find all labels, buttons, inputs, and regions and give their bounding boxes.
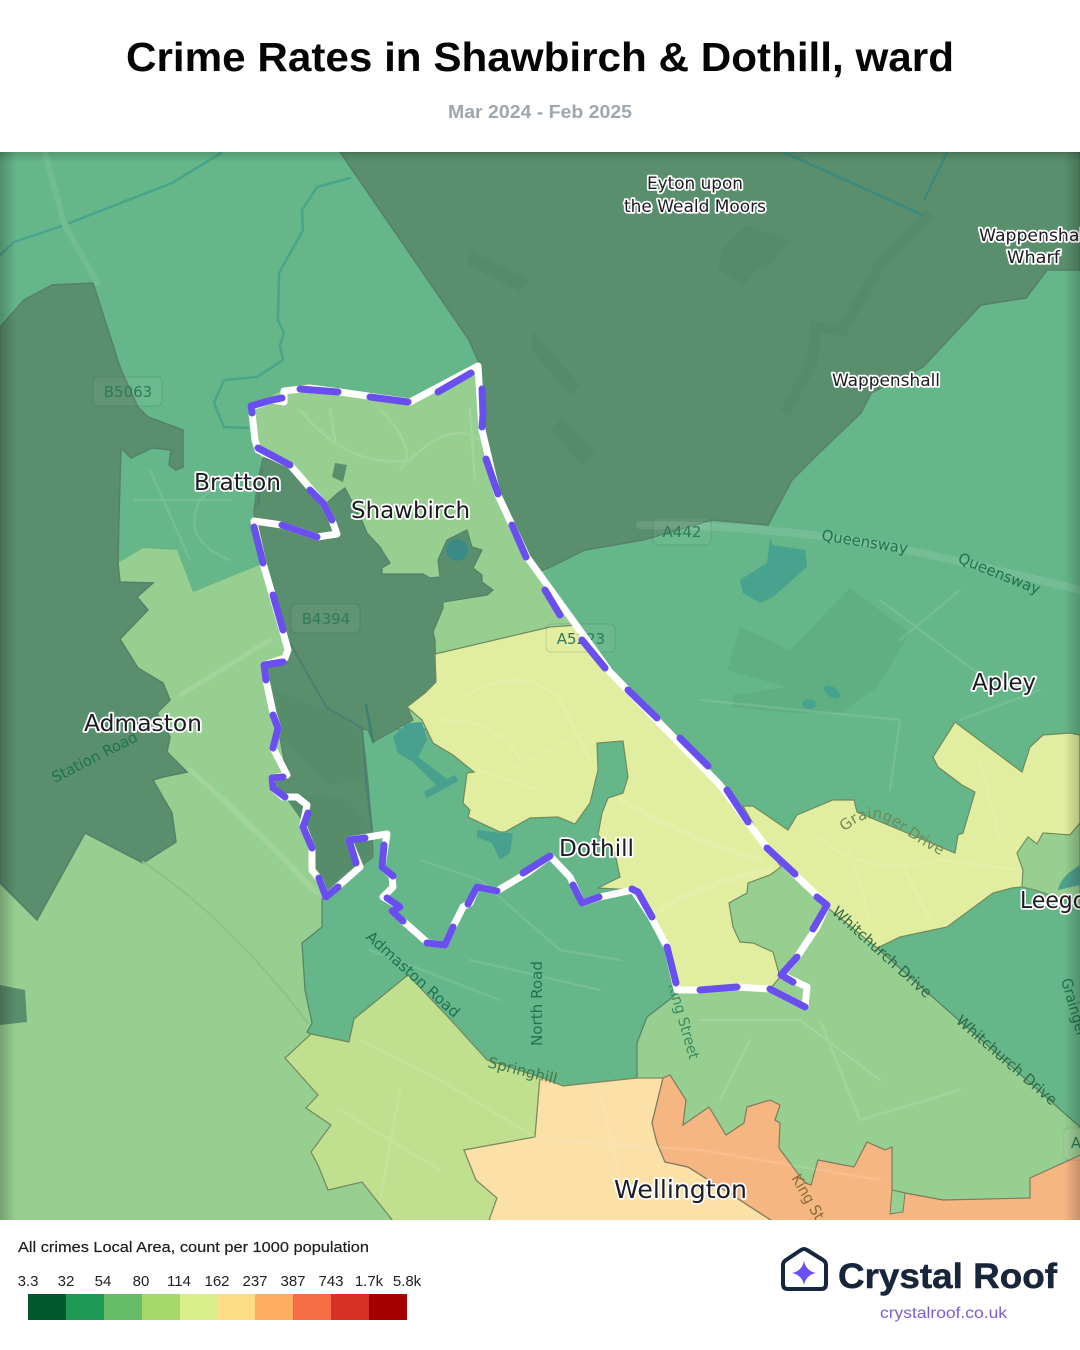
legend values: 54 [95,1273,111,1290]
area: darker parkland east [727,588,910,713]
road sign B4394 [291,604,360,633]
area: dark green patch south-west [0,985,27,1025]
place labels: the Weald Moors [624,197,766,217]
road sign A442 [653,517,711,545]
area: dark green Shawbirch centre [254,458,493,897]
legend colour scale [28,1294,407,1320]
place labels [84,174,1080,1204]
area: dark green features north [468,213,930,466]
area: small dark plot [332,463,347,482]
area: light green base [0,391,1080,1220]
area: light green Leegomery patch [1017,823,1080,905]
website: crystalroof.co.uk [880,1305,1008,1322]
road sign A5223 [546,624,615,652]
road sign A5223: A5223 [557,630,605,648]
legend values: 237 [242,1273,268,1290]
road sign B4394: B4394 [302,610,350,628]
icon: small ponds [802,686,840,709]
legend values: 162 [204,1273,230,1290]
road labels: Admaston Road [362,928,464,1021]
road labels: North Road [528,961,546,1046]
road labels: Queensway [820,526,909,558]
place labels: Shawbirch [351,498,470,524]
legend title: All crimes Local Area, count per 1000 population [18,1239,369,1256]
place labels: Wellington [614,1175,747,1204]
rivers and drains [0,153,1080,1127]
road sign A442: A442 [663,523,701,541]
lighter roads and streets [135,410,1080,1200]
area: orange Wellington centre [652,1075,1080,1226]
road sign partial A [1064,1128,1080,1160]
area: cream Wellington [464,1077,780,1226]
area: mid green north-west [0,152,485,592]
area: yellow west of King Street [407,625,781,990]
area: mid green wedge at Wellington [581,1208,617,1220]
legend values: 5.8k [393,1273,422,1290]
road labels: Grainger Drive [840,807,943,854]
road labels: Whitchurch Drive [828,903,935,1002]
legend values: 743 [318,1273,344,1290]
icon: pond east [1058,865,1080,890]
legend values: 3.3 [18,1273,38,1290]
place labels: Eyton upon [647,174,743,194]
road labels: King St [788,1171,828,1223]
choropleth map panel [0,152,1080,1220]
road labels: Queensway [956,549,1043,598]
legend values: 387 [280,1273,306,1290]
area: dark green north [340,152,1080,572]
area: mid green east [540,200,1080,1127]
place labels: Admaston [84,711,202,737]
legend values: 80 [133,1273,149,1290]
map edge vignette [0,152,1080,1220]
place labels: Apley [972,670,1036,696]
area: yellow east (Grainger Drive) [743,722,1080,948]
place labels: Dothill [559,836,634,862]
icon: ponds Dothill [393,722,513,860]
area: light green ward north [260,456,262,458]
place labels: Wharf [1007,248,1061,268]
legend values [18,1273,422,1290]
area: dark green west [0,283,187,920]
legend [18,1239,422,1320]
title: Crime Rates in Shawbirch & Dothill, ward [126,34,954,80]
place labels: Wappenshall [832,371,940,391]
ward boundary: white line [251,366,827,1007]
road labels: King Street [664,981,703,1061]
road labels: Whitchurch Drive [952,1011,1061,1109]
road sign B5063 [93,377,162,406]
legend values: 114 [167,1273,191,1290]
icon: pond in Shawbirch [446,539,468,561]
icon: house with star [783,1249,826,1289]
subtitle: date range: Mar 2024 - Feb 2025 [448,102,632,122]
area: mid green south (Dothill) [302,729,677,1086]
wordmark: Crystal Roof [838,1257,1057,1296]
road labels: Springhill [486,1053,559,1088]
road labels: Station Road [49,728,141,787]
icon: lake east [740,538,807,603]
area: darker tones inside Shawbirch [288,800,304,819]
ward boundary: purple dashes [251,373,827,1007]
logo: Crystal Roof [783,1249,1057,1322]
area: light gap in orange [890,1190,905,1214]
place labels: Bratton [194,470,281,496]
area: lime south-west [285,975,540,1226]
legend values: 1.7k [355,1273,384,1290]
legend values: 32 [58,1273,74,1290]
road labels [52,530,1080,1264]
road sign B5063: B5063 [104,383,152,401]
